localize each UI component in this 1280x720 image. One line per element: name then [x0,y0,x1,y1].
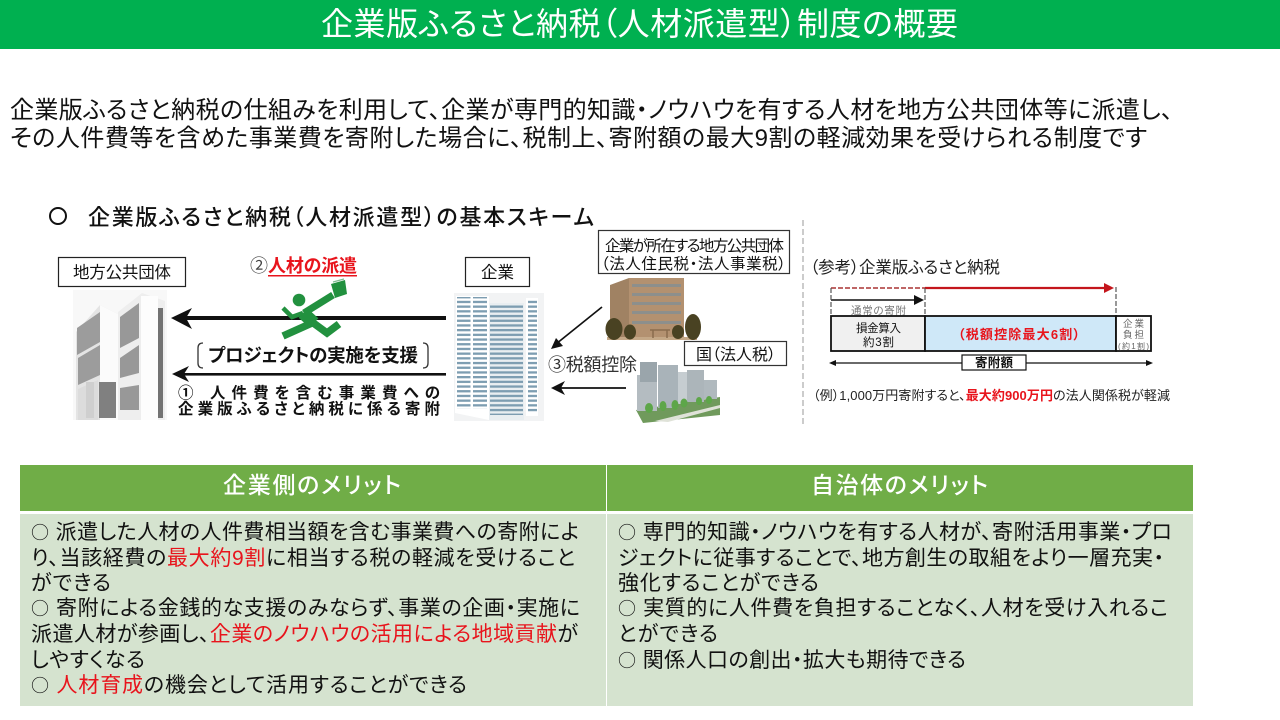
segment: deductible [831,316,925,351]
donation amount arrow: 寄附額 [975,355,1013,370]
bracket: project support: プロジェクトの実施を支援 [208,345,418,366]
header: municipality merits: 自治体のメリット [811,472,988,498]
title bar: 企業版ふるさと納税（人材派遣型）制度の概要 [321,6,958,42]
arrow: donation [172,366,446,382]
donation caption: ① 人件費を含む事業費への [178,383,440,402]
segment: deductible: 損金算入 [856,321,902,335]
intro text: その人件費等を含めた事業費を寄附した場合に、税制上、寄附額の最大9割の軽減効果を受けられる制度です [10,125,1147,152]
panel: company merits: 派遣人材が参画し、企業のノウハウの活用による地域貢献が [31,623,578,646]
header: company merits [20,465,606,511]
label: tax credit: ③税額控除 [548,355,637,375]
panel: municipality merits: とができる [618,623,718,646]
panel: company merits: しやすくなる [31,649,145,672]
label: municipality where the company is located [598,230,790,274]
donation amount arrow [829,355,1153,370]
panel: municipality merits: ジェクトに従事することで、地方創生の取組をより一層充実・ [618,547,1164,570]
intro text [10,97,1173,152]
reference heading: （参考）企業版ふるさと納税 [810,258,1000,277]
example note: （例）1,000万円寄附すると、最大約900万円の法人関係税が軽減 [813,388,1170,403]
icon: municipal office building [606,278,701,340]
table: merits [20,465,1193,706]
title bar [0,0,1280,49]
arrow: from municipality [551,307,602,349]
dashed red arrow section [831,283,1116,316]
panel: company merits: ○ 人材育成の機会として活用することができる [31,672,467,698]
label: company: 企業 [481,263,514,282]
segment: company burden: 負担 [1123,329,1144,341]
panel: company merits: ができる [31,572,111,595]
segment: tax credit: （税額控除最大6割） [958,327,1080,342]
panel: company merits [20,514,606,706]
segment: company burden [1116,316,1151,351]
panel: company merits: ○ 寄附による金銭的な支援のみならず、事業の企画・実施に [31,595,580,621]
icon: city buildings [636,362,720,423]
scheme heading: 企業版ふるさと納税（人材派遣型）の基本スキーム [88,205,594,230]
header: company merits: 企業側のメリット [223,472,401,498]
label: local government [58,258,186,286]
header: municipality merits [607,465,1193,511]
panel: company merits: り、当該経費の最大約9割に相当する税の軽減を受けること [31,547,575,570]
panel: municipality merits: 強化することができる [618,572,819,595]
label: national government: 国（法人税） [696,346,776,364]
label: municipality where the company is located: （法人住民税・法人事業税） [601,255,786,273]
panel: municipality merits: ○ 専門的知識・ノウハウを有する人材が、寄附活用事業・プロ [618,519,1172,545]
normal donation arrow [831,288,925,317]
panel: municipality merits [607,514,1193,706]
divider: dashed vertical [802,220,804,425]
segment: deductible: 約3割 [863,335,894,349]
donation caption: 企業版ふるさと納税に係る寄附 [178,399,440,418]
label: dispatch of personnel: ② [250,256,268,276]
donation caption [178,383,440,418]
intro text: 企業版ふるさと納税の仕組みを利用して、企業が専門的知識・ノウハウを有する人材を地方公共団体等に派遣し、 [10,97,1173,124]
label: local government: 地方公共団体 [73,263,172,282]
segment: company burden: 企業 [1123,318,1144,330]
icon: local government building [73,290,167,420]
icon: running businessperson [283,279,347,336]
icon: company tower [454,293,544,421]
label: national government [684,342,786,366]
label: dispatch of personnel: 人材の派遣 [268,256,357,276]
normal donation arrow: 通常の寄附 [851,304,906,317]
segment: tax credit [925,316,1116,351]
panel: municipality merits: ○ 実質的に人件費を負担することなく、人材を受け入れるこ [618,595,1168,621]
chart: donation breakdown [829,283,1153,370]
label: municipality where the company is located: 企業が所在する地方公共団体 [605,237,784,255]
label: company [466,258,530,286]
panel: company merits: ○ 派遣した人材の人件費相当額を含む事業費への寄附によ [31,519,579,545]
segment: company burden: (約1割) [1118,341,1149,351]
arrow: dispatch of personnel [171,308,446,329]
panel: municipality merits: ○ 関係人口の創出・拡大も期待できる [618,647,966,673]
arrow: from national government [551,381,626,395]
